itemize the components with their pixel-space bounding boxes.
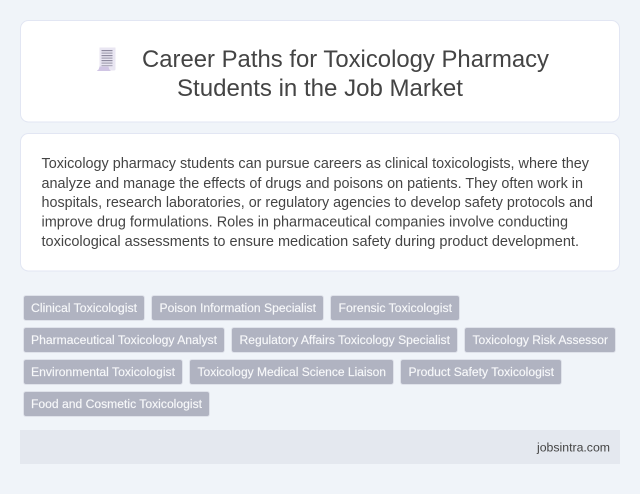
- tag: Clinical Toxicologist: Clinical Toxicologist: [31, 301, 138, 315]
- tag: Food and Cosmetic Toxicologist: [24, 392, 210, 416]
- tag: Poison Information Specialist: Poison Information Specialist: [160, 301, 317, 315]
- tag: Pharmaceutical Toxicology Analyst: Pharmaceutical Toxicology Analyst: [31, 333, 218, 347]
- title: Career Paths for Toxicology Pharmacy: [142, 46, 550, 73]
- tag: Forensic Toxicologist: [330, 296, 460, 320]
- text block: description: hospitals, research laboratories, or regulatory agencies to develop safety protocols and: [42, 195, 593, 211]
- tag: Poison Information Specialist: [152, 296, 324, 320]
- icon: document scroll: [97, 48, 116, 71]
- text block: description: analyze and manage the effects of drugs and poisons on patients. They often work in: [42, 176, 583, 192]
- title: [142, 46, 550, 102]
- tag: Toxicology Medical Science Liaison: [190, 360, 394, 384]
- tag: Regulatory Affairs Toxicology Specialist: Regulatory Affairs Toxicology Specialist: [240, 333, 451, 347]
- tag: Toxicology Risk Assessor: [464, 328, 616, 352]
- tag: Environmental Toxicologist: Environmental Toxicologist: [31, 365, 176, 379]
- tag: Environmental Toxicologist: [24, 360, 182, 384]
- tag: Food and Cosmetic Toxicologist: Food and Cosmetic Toxicologist: [31, 397, 203, 411]
- panel: header: [20, 20, 620, 122]
- footer: jobsintra.com: [536, 440, 610, 454]
- tag: Forensic Toxicologist: Forensic Toxicologist: [338, 301, 453, 315]
- tag: Clinical Toxicologist: [24, 296, 144, 320]
- tag list: [24, 296, 616, 416]
- tag: Toxicology Risk Assessor: Toxicology Risk Assessor: [472, 333, 608, 347]
- text block: description: [42, 156, 593, 250]
- tag: Regulatory Affairs Toxicology Specialist: [232, 328, 458, 352]
- text block: description: toxicological assessments to ensure medication safety during product development.: [42, 234, 579, 250]
- tag: Pharmaceutical Toxicology Analyst: [24, 328, 224, 352]
- text block: description: Toxicology pharmacy students can pursue careers as clinical toxicologists, where they: [42, 156, 590, 172]
- tag: Toxicology Medical Science Liaison: Toxicology Medical Science Liaison: [198, 365, 386, 379]
- tag: Product Safety Toxicologist: Product Safety Toxicologist: [408, 365, 555, 379]
- text block: description: improve drug formulations. Roles in pharmaceutical companies involve conducting: [42, 214, 568, 230]
- tag: Product Safety Toxicologist: [400, 360, 562, 384]
- title: Students in the Job Market: [177, 75, 463, 102]
- footer: [20, 430, 620, 464]
- panel: description: [20, 134, 620, 271]
